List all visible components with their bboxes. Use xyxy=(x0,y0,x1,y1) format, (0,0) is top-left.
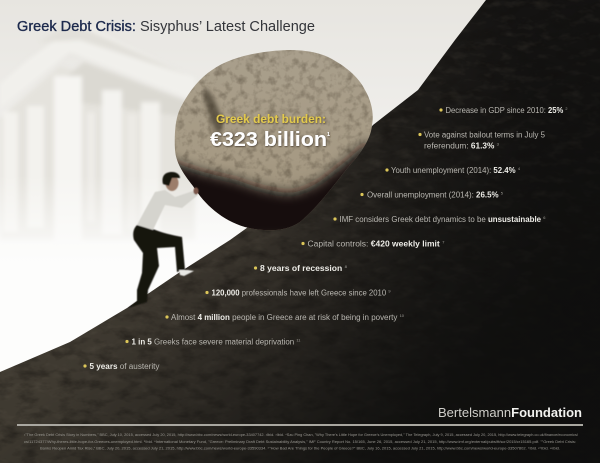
debt burden value: 1 xyxy=(327,132,330,138)
fact: IMF: 6 xyxy=(543,215,546,220)
fact: GDP: Decrease in GDP since 2010: 25% xyxy=(446,106,564,115)
temple backdrop xyxy=(0,22,240,385)
fact: overall unemployment: 5 xyxy=(501,190,504,196)
fact: austerity: 5 years of austerity xyxy=(90,362,160,371)
Bertelsmann Foundation logo: BertelsmannFoundation xyxy=(438,405,582,420)
fact: recession: 8 xyxy=(345,264,348,269)
man: foot xyxy=(179,270,194,276)
man: shirt xyxy=(137,190,198,230)
man: legs xyxy=(128,225,185,308)
fact: poverty: 10 xyxy=(400,313,405,318)
fact: referendum: referendum: 61.3% xyxy=(424,142,494,150)
footnotes xyxy=(24,433,578,450)
fact: professionals: 9 xyxy=(388,288,391,294)
facts list xyxy=(83,106,568,371)
footnotes: cs/11724377/Why-theres-little-hope-for-Greeces-unemployed.html. ⁵Ibid. ⁶International Monetary Fund, "Greece: Preliminary Draft Debt Sustainability Analysis," IMF Country Report No. 15/165, June 26, 2015, accessed July 21, 2015, http://www.imf.org/external/pubs/ft/scr/2015/cr15165.pdf. ⁷"Greek Debt Crisis: xyxy=(24,440,576,444)
fact: overall unemployment: Overall unemployment (2014): 26.5% xyxy=(367,190,499,200)
boulder xyxy=(174,50,373,230)
boulder: shadowed underside xyxy=(176,136,369,230)
debt burden value: €323 billion xyxy=(210,129,319,151)
man: hand xyxy=(193,187,199,195)
fact: referendum: Vote against bailout terms in July 5 xyxy=(424,130,546,140)
fact: GDP: 2 xyxy=(565,106,568,111)
man: hair xyxy=(163,172,180,186)
title: Greek Debt Crisis: Sisyphus’ Latest Challenge xyxy=(17,18,315,35)
fact: deprivation: 11 xyxy=(296,338,301,342)
man: head xyxy=(166,175,178,191)
debt burden heading: Greek debt burden: xyxy=(216,114,326,126)
fact: professionals: 120,000 professionals have left Greece since 2010 xyxy=(212,288,391,298)
footnotes: Banks Reopen Amid Tax Rise," BBC, July 20, 2015, accessed July 21, 2015, http://www.bbc.com/news/world-europe-33590334. ⁸"How Bad Are Things for the People of Greece?" BBC, July 16, 2015, accessed July 21, 2015, http://www.bbc.com/news/world-europe-33507802. ⁹Ibid. ¹⁰Ibid. ¹¹Ibid. xyxy=(40,446,560,450)
fact: referendum xyxy=(418,130,546,150)
fact: referendum: 3 xyxy=(497,142,500,146)
fact: youth unemployment: Youth unemployment (2014): 52.4% xyxy=(391,166,516,175)
boulder label xyxy=(210,114,330,151)
fact: IMF: IMF considers Greek debt dynamics to be unsustainable xyxy=(340,215,542,224)
fact: recession: 8 years of recession xyxy=(260,264,342,273)
footnotes: ¹"The Greek Debt Crisis Story in Numbers," BBC, July 10, 2015, accessed July 20, 2015, http://www.bbc.com/news/world-europe-33407742. ²Ibid. ³Ibid. ⁴Szu Ping Chan, "Why There's Little Hope for Greece's Unemployed," The Telegraph, July 9, 2015, accessed July 20, 2015, http://www.telegraph.co.uk/finance/economics/ xyxy=(24,433,578,437)
footer rule xyxy=(17,424,583,426)
fact: youth unemployment: 4 xyxy=(518,166,521,171)
fact: deprivation: 1 in 5 Greeks face severe material deprivation xyxy=(132,338,295,346)
fact: capital controls: Capital controls: €420 weekly limit xyxy=(308,240,436,248)
boulder: dark crevice xyxy=(203,88,223,133)
man pushing boulder xyxy=(128,172,199,308)
fact: poverty: Almost 4 million people in Greece are at risk of being in poverty xyxy=(171,313,398,322)
fact: capital controls: 7 xyxy=(442,240,445,244)
